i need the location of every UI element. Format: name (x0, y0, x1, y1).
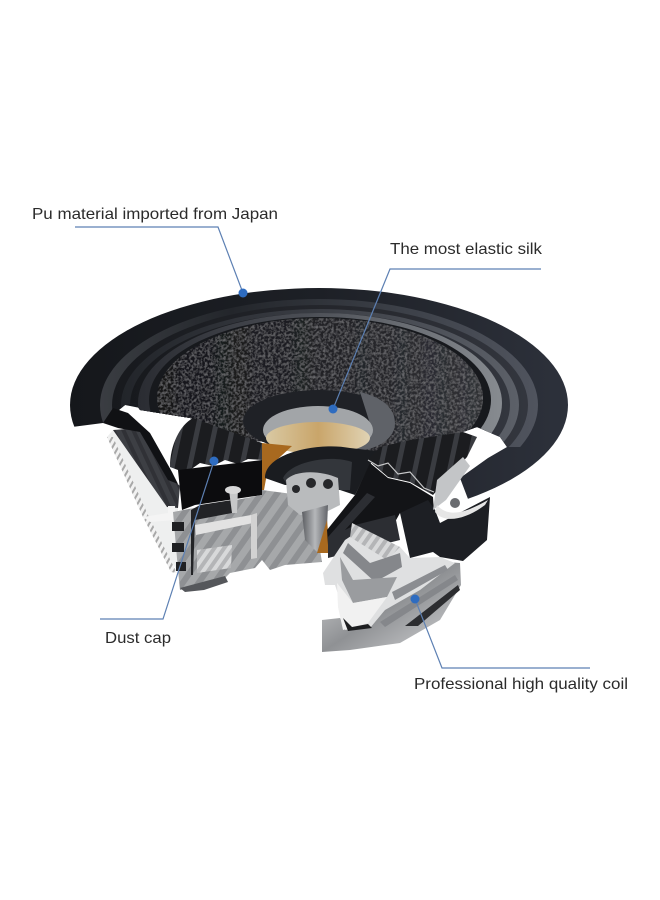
infographic: speaker cutaway diagram (33, 208, 627, 692)
foam cone (157, 318, 483, 451)
callout: Pu material: Pu material imported from Japan (32, 206, 278, 223)
inner black chamber (327, 463, 435, 545)
callout: dust cap: Dust cap (105, 630, 171, 647)
dust cap recess (243, 390, 395, 454)
callout: elastic silk (328, 241, 543, 414)
center pole block (262, 443, 385, 570)
speaker illustration (70, 288, 568, 652)
left basket frame (103, 408, 180, 573)
callout: elastic silk: The most elastic silk (390, 241, 543, 258)
callout: coil: Professional high quality coil (414, 676, 628, 693)
callout: coil (410, 594, 628, 693)
magnet block and screw (172, 486, 262, 592)
lower magnet and coil stack (322, 523, 461, 652)
left lower chamber (178, 460, 262, 510)
left spider (170, 418, 262, 470)
callout: Pu material (32, 206, 278, 298)
black connector housing (400, 497, 490, 561)
right spider (368, 432, 477, 495)
terminal (433, 457, 488, 519)
basket rim and surround (70, 288, 568, 522)
callout: dust cap (100, 456, 218, 647)
